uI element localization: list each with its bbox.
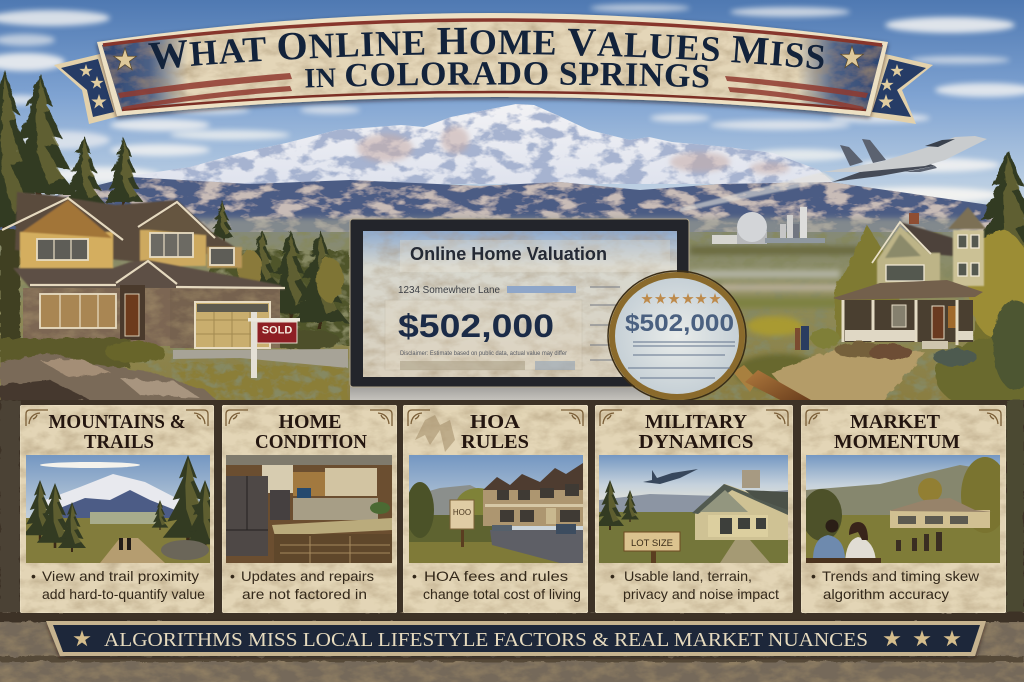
banner bottom red stripe (122, 92, 866, 110)
house upper walls (877, 207, 986, 288)
card: mountains and trails: TRAILS (84, 431, 154, 453)
banner body (97, 13, 888, 116)
corner ornaments (408, 410, 583, 426)
right trees (835, 150, 1024, 410)
rocks (0, 353, 222, 405)
valley haze (130, 218, 960, 240)
entry alcove (120, 285, 145, 340)
monitor frame (350, 219, 689, 387)
lens (612, 275, 742, 397)
corner ornaments (26, 410, 208, 426)
left house with sold sign (0, 192, 348, 405)
address bar (507, 286, 576, 293)
handle (733, 365, 818, 410)
monitor stand base (350, 385, 650, 405)
banner stars (114, 46, 863, 70)
bullet text: • (811, 568, 816, 584)
corner ornaments (226, 410, 392, 426)
right red stripes (725, 76, 868, 110)
porch roof (833, 280, 983, 300)
bullet text: • (610, 568, 615, 584)
title line one: WHAT ONLINE HOME VALUES MISS (148, 28, 824, 70)
scene: jet over house (596, 455, 788, 563)
scene: townhouses (406, 455, 583, 563)
left ribbon tail (54, 54, 120, 124)
ground band behind cards (0, 400, 1024, 682)
heading: MILITARY (645, 411, 748, 433)
gable trim (2, 198, 285, 288)
scene: jet over house: LOT SIZE (631, 538, 673, 549)
jet fighter (823, 136, 987, 182)
left house body (13, 192, 285, 290)
distant valley landscape (0, 232, 1024, 410)
card: market momentum (801, 405, 1009, 613)
fine print: Disclaimer: Estimate based on public data, actual value may differ (400, 350, 568, 357)
magnifying glass (608, 271, 818, 410)
shrubs and grass (0, 338, 348, 405)
footer border (46, 621, 986, 656)
card: market momentum: MOMENTUM (834, 431, 960, 453)
address: 1234 Somewhere Lane (398, 284, 500, 296)
title line two: IN COLORADO SPRINGS (305, 62, 708, 88)
jet contrail (680, 172, 835, 212)
card: HOA rules: RULES (461, 431, 529, 453)
bullet text: • (412, 568, 417, 584)
screen (363, 231, 677, 377)
card: home condition: CONDITION (255, 431, 368, 453)
card: mountains and trails: View and trail proximity (42, 568, 199, 584)
card frame (222, 405, 397, 613)
right house with porch (795, 207, 986, 366)
magnified price: $502,000 (625, 310, 734, 337)
monitor with online valuation (350, 219, 689, 405)
sold sign: SOLD (262, 324, 292, 336)
pink rock faces (357, 126, 790, 174)
card: mountains and trails (20, 405, 225, 613)
card frame (403, 405, 588, 613)
card: HOA rules: HOA fees and rules (424, 568, 568, 584)
garage door (195, 302, 270, 348)
stone walls (23, 288, 280, 348)
right ribbon tail (866, 54, 933, 124)
banner top red stripe (103, 20, 882, 45)
blue foothills (0, 177, 1024, 240)
ghost figure mark (415, 415, 455, 452)
card: military dynamics (595, 405, 793, 613)
card: home condition (222, 405, 397, 613)
card: military dynamics: Usable land, terrain, (624, 568, 752, 584)
card: military dynamics: DYNAMICS (638, 431, 754, 453)
card: market momentum: Trends and timing skew (822, 568, 980, 584)
left trees and forest (0, 70, 350, 360)
mountain: Pikes Peak range (0, 104, 1024, 240)
fine print (400, 287, 620, 370)
heading: HOA (470, 411, 521, 433)
left red stripes (118, 73, 292, 110)
driveway (173, 349, 348, 368)
card frame (595, 405, 793, 613)
footer banner (46, 621, 986, 656)
walking couple (795, 326, 809, 350)
heading: MARKET (850, 411, 941, 433)
corner ornaments (806, 410, 1001, 426)
military installation domes (712, 207, 825, 244)
price: $502,000 (398, 308, 554, 344)
card: military dynamics: privacy and noise impact (623, 586, 779, 602)
path to the right house (770, 345, 925, 405)
card: home condition: are not factored in (242, 586, 367, 602)
footer panel (53, 625, 980, 652)
magnified lines (628, 342, 735, 378)
heading: MOUNTAINS & (48, 411, 186, 433)
bullet text: • (230, 568, 235, 584)
sky background (0, 0, 1024, 240)
house windows (37, 233, 234, 328)
porch (843, 300, 973, 349)
card: mountains and trails: add hard-to-quantify value (42, 586, 205, 602)
front door (125, 294, 139, 336)
upper windows (886, 235, 979, 281)
heading: HOME (278, 411, 342, 433)
footer message: ALGORITHMS MISS LOCAL LIFESTYLE FACTORS & REAL MARKET NUANCES (104, 629, 868, 651)
card: HOA rules (403, 405, 588, 613)
corner ornaments (600, 410, 788, 426)
card frame (801, 405, 1006, 613)
title banner (54, 12, 933, 124)
card: market momentum: algorithm accuracy (823, 586, 949, 602)
scene: kitchen (226, 455, 392, 563)
card frame (20, 405, 214, 613)
flower shrubs (811, 328, 977, 366)
scene: townhouses: HOO (453, 508, 471, 517)
cloud band behind heading (400, 240, 670, 272)
mountain mottled snow and rock (130, 104, 835, 184)
valuation heading: Online Home Valuation (410, 244, 607, 264)
card: home condition: Updates and repairs (241, 568, 374, 584)
scene: couple viewing a home (802, 455, 1009, 563)
lens rating stars (641, 293, 721, 304)
scene: mountain trail (23, 455, 225, 563)
footer stars (73, 630, 961, 646)
bullet text: • (31, 568, 36, 584)
chimney (909, 213, 919, 224)
card: HOA rules: change total cost of living (423, 586, 581, 602)
value panel (385, 300, 582, 370)
sold sign (248, 312, 300, 378)
gable trim (872, 222, 931, 263)
